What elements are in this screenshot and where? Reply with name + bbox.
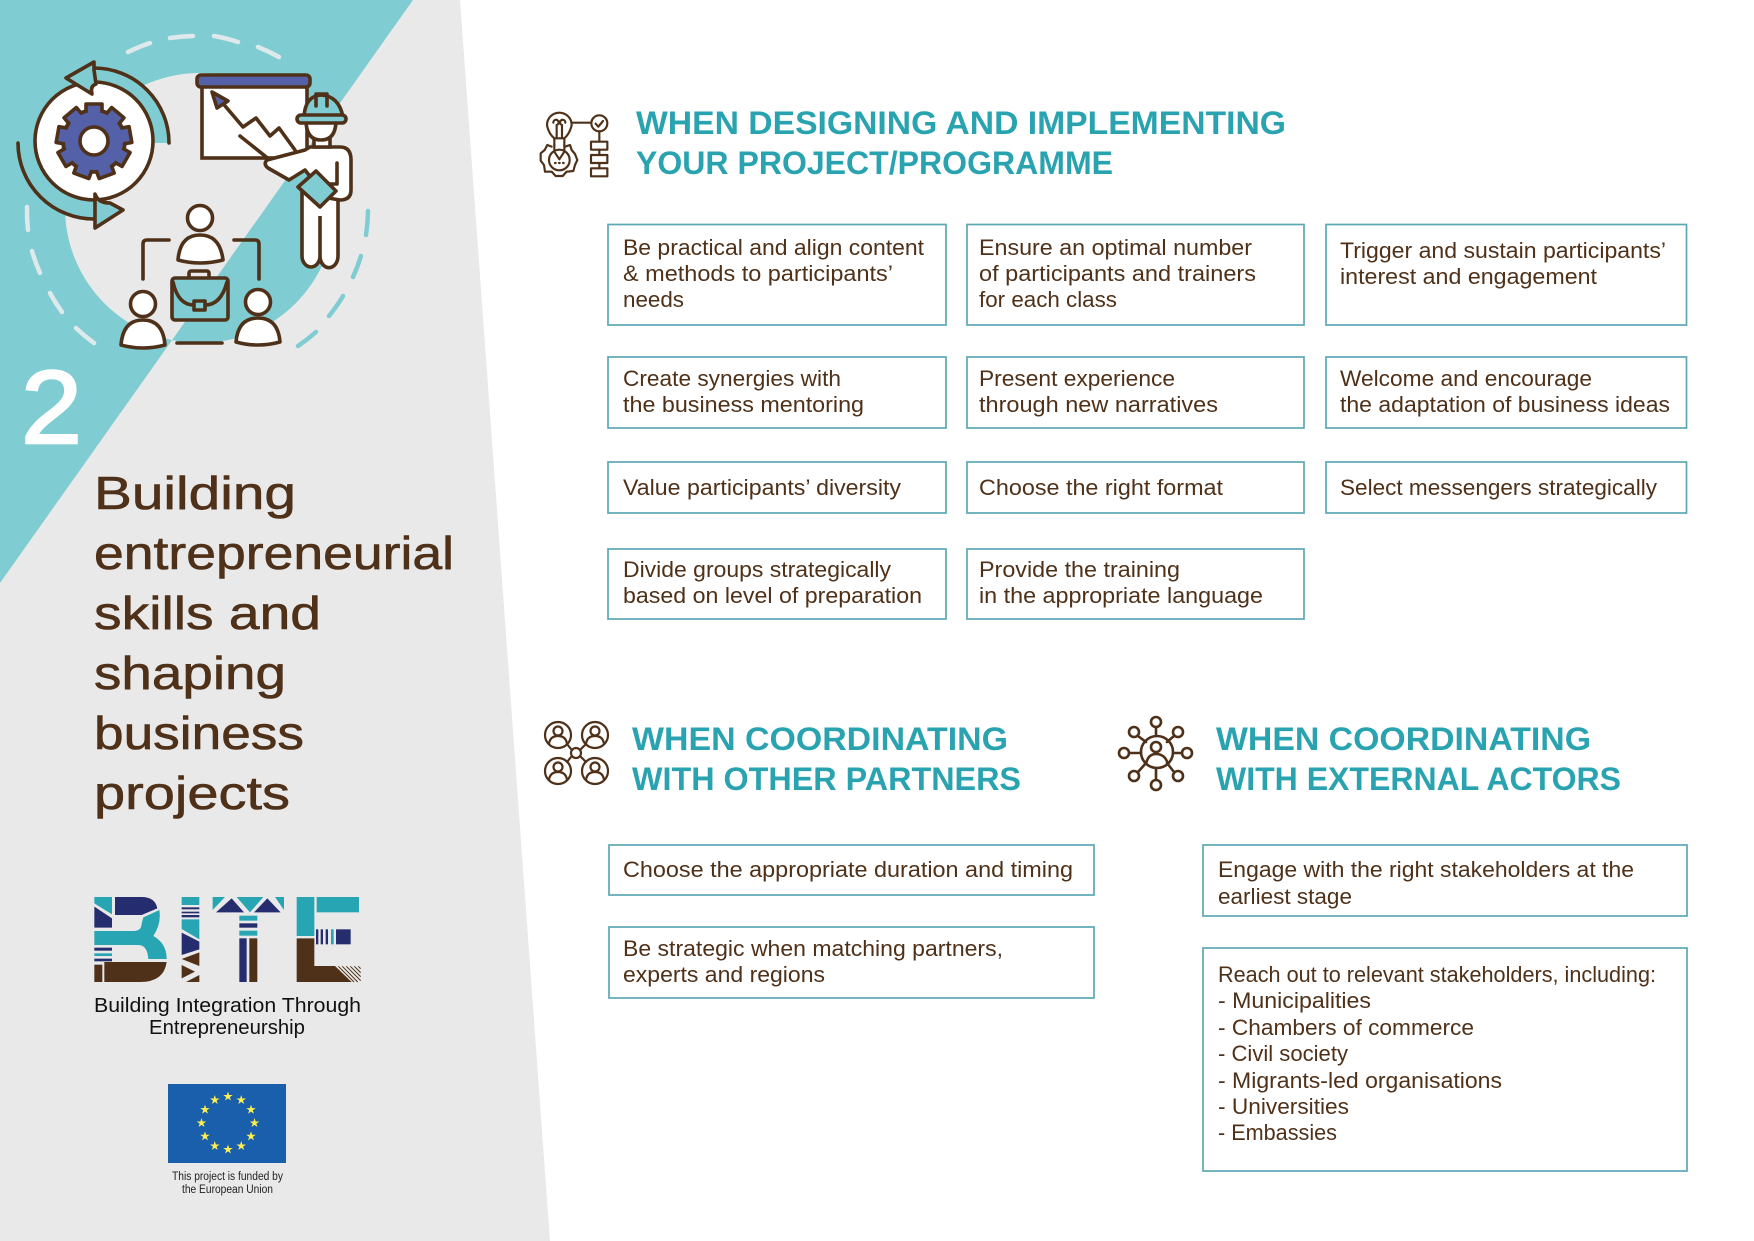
- box: divide groups: Divide groups strategically: [623, 557, 891, 582]
- box: messengers: Select messengers strategically: [1340, 475, 1657, 500]
- heading: external actors: WHEN COORDINATING: [1216, 721, 1591, 757]
- box: appropriate language: in the appropriate language: [979, 583, 1263, 608]
- heading: designing and implementing: [636, 105, 1286, 181]
- box: new narratives: Present experience: [979, 366, 1175, 391]
- illustration: project, gear and people icon: [18, 36, 368, 348]
- icon: three people around a briefcase: [121, 206, 280, 348]
- box: diversity: Value participants’ diversity: [623, 475, 901, 500]
- section number: 2: [21, 350, 82, 466]
- title: entrepreneurial: [94, 527, 454, 579]
- heading: external actors: [1216, 721, 1621, 797]
- box: interest and engagement: interest and engagement: [1340, 264, 1597, 289]
- box: duration and timing: [609, 845, 1094, 895]
- panel: left grey sidebar: [0, 0, 550, 1241]
- box: adaptation of ideas: the adaptation of business ideas: [1340, 392, 1670, 417]
- heading: designing and implementing: WHEN DESIGNING AND IMPLEMENTING: [636, 105, 1286, 141]
- heading: external actors: WITH EXTERNAL ACTORS: [1216, 761, 1621, 797]
- box: relevant stakeholders list: - Migrants-led organisations: [1218, 1068, 1502, 1093]
- logo tagline: Entrepreneurship: [149, 1017, 305, 1039]
- logo: BITE: [94, 897, 361, 982]
- box: relevant stakeholders list: - Universities: [1218, 1094, 1349, 1119]
- box: divide groups: [608, 549, 946, 619]
- funding note: the European Union: [182, 1184, 273, 1196]
- title: shaping: [94, 647, 286, 699]
- box: right format: [967, 462, 1304, 513]
- box: relevant stakeholders list: Reach out to relevant stakeholders, including:: [1218, 962, 1656, 987]
- icon: presentation board with chart: [197, 75, 310, 160]
- box: duration and timing: Choose the appropriate duration and timing: [623, 857, 1073, 882]
- icon: circular arrows around gear: [18, 62, 169, 228]
- icon: lightbulb, gear and flowchart: [541, 113, 607, 176]
- icon: four connected partners: [545, 722, 608, 784]
- title: [94, 467, 454, 819]
- funding note: [172, 1171, 283, 1196]
- title: skills and: [94, 587, 321, 639]
- box: right stakeholders: Engage with the right stakeholders at the: [1218, 857, 1634, 882]
- box: synergies: the business mentoring: [623, 392, 864, 417]
- box: relevant stakeholders list: - Municipalities: [1218, 988, 1371, 1013]
- box: relevant stakeholders list: - Embassies: [1218, 1120, 1337, 1145]
- box: practical content: Be practical and align content: [623, 235, 924, 260]
- icon: worker with helmet: [265, 94, 351, 268]
- box: optimal number: for each class: [979, 287, 1117, 312]
- box: optimal number: [967, 224, 1304, 325]
- box: right format: Choose the right format: [979, 475, 1223, 500]
- box: matching partners: experts and regions: [623, 962, 825, 987]
- box: right stakeholders: [1203, 845, 1687, 916]
- box: relevant stakeholders list: - Civil society: [1218, 1041, 1348, 1066]
- heading: other partners: WHEN COORDINATING: [632, 721, 1008, 757]
- logo tagline: Building Integration Through: [94, 995, 361, 1017]
- funding note: This project is funded by: [172, 1171, 283, 1183]
- box: relevant stakeholders list: [1203, 948, 1687, 1171]
- box: matching partners: [609, 927, 1094, 998]
- box: interest and engagement: Trigger and sustain participants’: [1340, 238, 1666, 263]
- box: appropriate language: Provide the training: [979, 557, 1180, 582]
- box: optimal number: Ensure an optimal number: [979, 235, 1252, 260]
- box: new narratives: through new narratives: [979, 392, 1218, 417]
- box: adaptation of ideas: [1326, 357, 1686, 428]
- box: relevant stakeholders list: - Chambers of commerce: [1218, 1015, 1474, 1040]
- box: practical content: needs: [623, 287, 684, 312]
- title: Building: [94, 467, 296, 519]
- box: optimal number: of participants and trainers: [979, 261, 1256, 286]
- box: messengers: [1326, 462, 1686, 513]
- panel: teal corner triangle: [0, 0, 413, 583]
- box: interest and engagement: [1326, 224, 1686, 325]
- box: right stakeholders: earliest stage: [1218, 884, 1352, 909]
- box: appropriate language: [967, 549, 1304, 619]
- box: practical content: & methods to participants’: [623, 261, 893, 286]
- box: synergies: Create synergies with: [623, 366, 841, 391]
- box: new narratives: [967, 357, 1304, 428]
- heading: designing and implementing: YOUR PROJECT/PROGRAMME: [636, 145, 1113, 181]
- heading: other partners: [632, 721, 1021, 797]
- heading: other partners: WITH OTHER PARTNERS: [632, 761, 1021, 797]
- box: synergies: [608, 357, 946, 428]
- box: practical content: [608, 224, 946, 325]
- icon: network around a person: [1119, 717, 1192, 790]
- logo: EU flag: [168, 1084, 286, 1163]
- box: diversity: [608, 462, 946, 513]
- box: divide groups: based on level of preparation: [623, 583, 922, 608]
- box: matching partners: Be strategic when matching partners,: [623, 936, 1003, 961]
- title: business: [94, 707, 304, 759]
- logo tagline: [94, 995, 361, 1039]
- title: projects: [94, 767, 290, 819]
- box: adaptation of ideas: Welcome and encourage: [1340, 366, 1592, 391]
